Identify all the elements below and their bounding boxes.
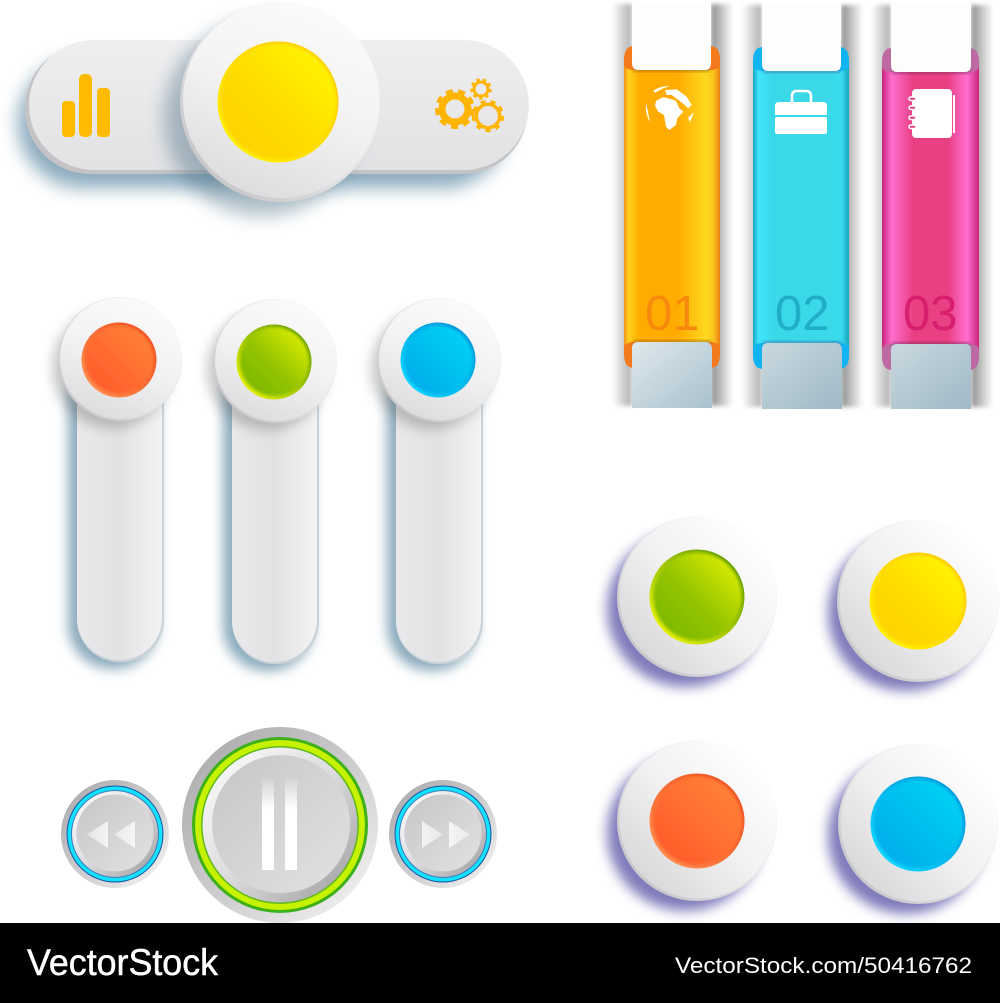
icon: bar chart [62, 74, 110, 137]
panel: ribbon tab 03 pink [871, 4, 993, 409]
bottom paper strip [891, 342, 971, 409]
slider track [77, 345, 164, 662]
knob [58, 297, 182, 421]
ribbon body [882, 48, 979, 370]
number 02: 02 [775, 287, 830, 341]
panel: ribbon tab 02 blue [742, 4, 863, 409]
yellow knob [180, 2, 380, 202]
fast forward button [389, 780, 497, 888]
number 01: 01 [645, 287, 700, 341]
brand name: VectorStock [27, 942, 218, 983]
bottom paper strip [762, 341, 842, 409]
panel: media player controls [61, 727, 497, 923]
number 03: 03 [903, 287, 958, 341]
icon: gears [437, 80, 503, 131]
slider track [232, 347, 319, 664]
panel: round yellow button [828, 520, 999, 691]
ribbon body [753, 47, 849, 369]
image url: VectorStock.com/50416762 [675, 953, 972, 978]
top paper strip [891, 4, 971, 74]
pause button [182, 727, 378, 923]
icon: briefcase [775, 91, 827, 134]
ribbon body [624, 46, 720, 368]
panel: vertical slider green [207, 299, 337, 671]
footer: watermark bar [0, 923, 1000, 1003]
top paper strip [762, 4, 841, 73]
top paper strip [632, 3, 711, 72]
knob [377, 298, 501, 422]
panel: vertical slider blue [371, 298, 501, 671]
knob [213, 299, 337, 423]
icon: rewind arrows [87, 821, 135, 848]
panel: round blue button [828, 744, 998, 914]
panel: ribbon tab 01 orange [612, 3, 733, 408]
icon: notebook [909, 89, 955, 138]
icon: globe [646, 86, 694, 130]
icon: pause bars [262, 778, 297, 870]
panel: round orange button [607, 741, 777, 911]
slider track [396, 347, 483, 664]
panel: horizontal pill slider with yellow knob [18, 2, 529, 216]
panel: vertical slider red [52, 297, 182, 669]
panel: round green button [607, 517, 777, 687]
pill body [25, 40, 529, 174]
rewind button [61, 780, 169, 888]
icon: forward arrows [422, 821, 470, 848]
bottom paper strip [632, 340, 712, 408]
